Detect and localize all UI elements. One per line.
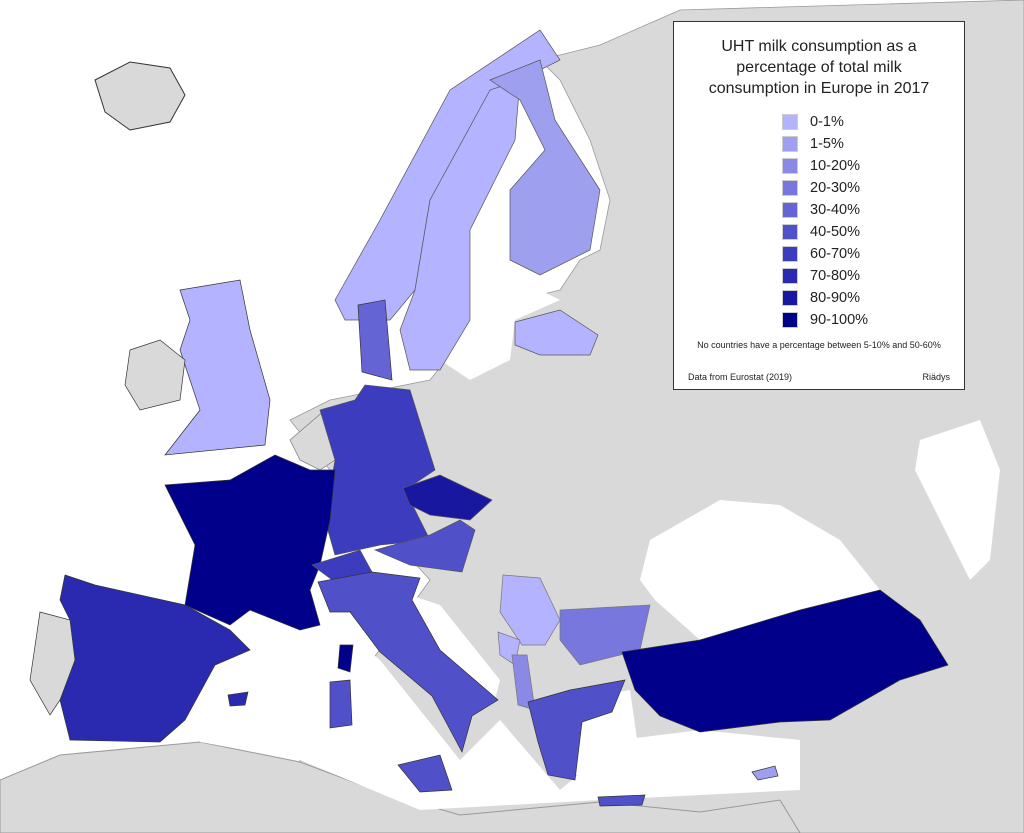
country: balearics <box>228 692 248 706</box>
country: czechia <box>403 475 492 520</box>
author: Riädys <box>922 372 950 382</box>
legend item 60-70 <box>782 246 860 262</box>
legend item 40-50: 40-50% <box>810 224 860 240</box>
country: france <box>165 455 335 630</box>
country: sicily <box>398 755 452 792</box>
legend item 60-70: 60-70% <box>810 246 860 262</box>
legend title: UHT milk consumption as a <box>721 38 917 55</box>
legend item 10-20 <box>782 158 860 174</box>
country: portugal <box>30 612 75 715</box>
country: cyprus <box>752 766 778 780</box>
country: ireland <box>125 340 185 410</box>
country: turkey <box>622 590 948 732</box>
legend title: percentage of total milk <box>736 59 902 76</box>
gray land base <box>290 0 1024 833</box>
legend item 10-20: 10-20% <box>810 158 860 174</box>
legend item 20-30 <box>782 180 860 196</box>
country: sweden <box>400 80 520 370</box>
note: No countries have a percentage between 5-10% and 50-60% <box>697 340 941 350</box>
country: albania <box>512 655 535 710</box>
country: serbia <box>500 575 560 645</box>
legend item 70-80: 70-80% <box>810 268 860 284</box>
country: uk <box>165 280 270 455</box>
country: sardinia <box>330 680 352 728</box>
country: greece <box>528 680 625 780</box>
legend item 1-5: 1-5% <box>810 136 844 152</box>
country: switzerland <box>312 550 372 582</box>
country: austria <box>375 520 475 572</box>
country: italy <box>318 572 498 752</box>
legend item 90-100: 90-100% <box>810 312 868 328</box>
country: spain <box>60 575 250 742</box>
country: benelux <box>290 410 335 470</box>
legend title: consumption in Europe in 2017 <box>709 80 929 97</box>
legend item 40-50 <box>782 224 860 240</box>
legend item 80-90 <box>782 290 860 306</box>
legend item 30-40 <box>782 202 860 218</box>
country: latvia <box>515 310 598 355</box>
legend item 90-100 <box>782 312 868 328</box>
source: Data from Eurostat (2019) <box>688 372 792 382</box>
country: norway <box>335 30 560 320</box>
legend item 20-30: 20-30% <box>810 180 860 196</box>
country: montenegro <box>498 632 520 665</box>
legend item 70-80 <box>782 268 860 284</box>
legend item 0-1: 0-1% <box>810 114 844 130</box>
seas <box>440 260 560 380</box>
legend item 80-90: 80-90% <box>810 290 860 306</box>
legend item 30-40: 30-40% <box>810 202 860 218</box>
country: finland <box>490 60 600 275</box>
country: germany <box>320 385 435 555</box>
legend <box>673 21 965 390</box>
north africa <box>0 742 800 833</box>
country: denmark <box>358 300 392 380</box>
country: bulgaria <box>560 605 650 665</box>
legend item 1-5 <box>782 136 844 152</box>
country: corsica <box>338 645 353 672</box>
legend item 0-1 <box>782 114 844 130</box>
legend title <box>709 38 929 97</box>
iceland <box>95 62 185 130</box>
country: crete <box>598 795 645 806</box>
